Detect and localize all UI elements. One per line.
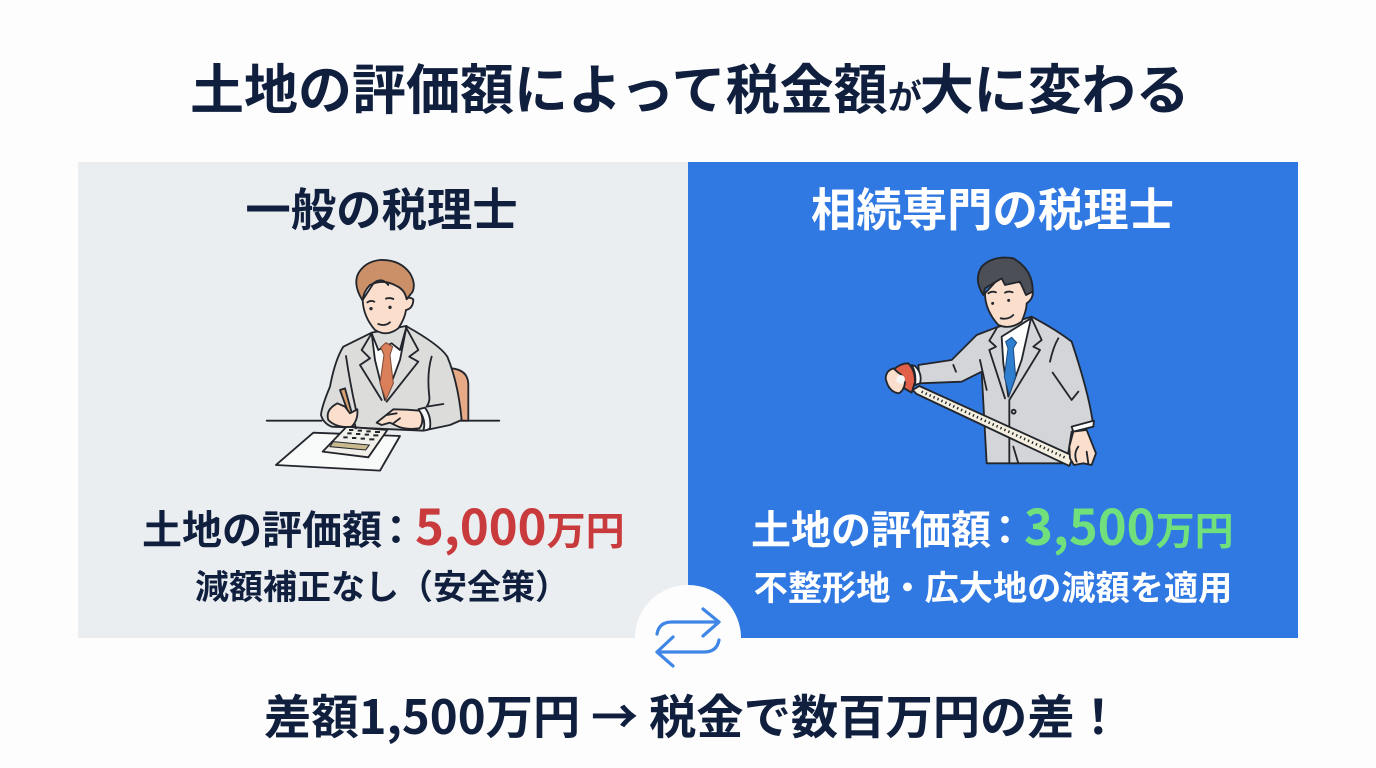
conclusion: 差額1,500万円 → 税金で数百万円の差！ [264, 679, 1122, 748]
illustration: man with a tape measure [886, 258, 1096, 466]
illustration: man using a calculator [267, 260, 499, 471]
panel: general tax accountant: 5,000万円 [415, 489, 625, 560]
heading: general tax accountant: 一般の税理士 [245, 174, 518, 240]
note: general: 減額補正なし（安全策） [195, 560, 569, 609]
panel: general tax accountant [78, 162, 688, 638]
valuation: specialist: 土地の評価額 [751, 498, 991, 556]
note: specialist: 不整形地・広大地の減額を適用 [754, 560, 1232, 610]
heading: inheritance specialist: 相続専門の税理士 [811, 174, 1174, 240]
panel: inheritance specialist: 3,500万円 [1024, 489, 1234, 560]
valuation: general: ： [376, 498, 416, 556]
icon: exchange arrows [635, 585, 741, 666]
panel: inheritance specialist [688, 162, 1298, 638]
valuation: specialist: ： [985, 498, 1025, 556]
valuation: general: 土地の評価額 [142, 498, 382, 556]
title: 土地の評価額によって税金額が大に変わる [190, 46, 1190, 125]
